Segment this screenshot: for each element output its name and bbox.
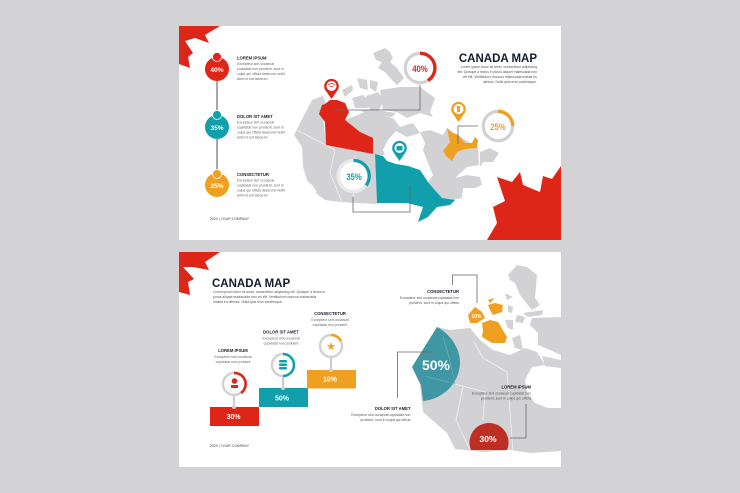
description bottom: Lorem ipsum dolor sit amet, consectetur adipiscing elit. Quisque a lectus in [213, 290, 325, 294]
footer bottom: 2020 | YOUR COMPANY [210, 444, 250, 448]
legend column: Excepteur sint occaecat [237, 178, 274, 182]
step labels: Excepteur sint occaecat [262, 336, 300, 340]
legend column: DOLOR SIT AMET [237, 114, 273, 119]
label: consectetur: proident, sunt in culpa qui officia [409, 301, 459, 305]
connector lines [333, 85, 478, 212]
coast cut bottom [426, 420, 437, 436]
region: teal [375, 154, 455, 222]
footer top: 2020 | YOUR COMPANY [210, 217, 250, 221]
region: red 30% [470, 423, 508, 450]
step chart: 10% [323, 376, 338, 384]
legend column: Excepteur sint occaecat [237, 120, 274, 124]
description bottom: purus aliquet malesuada non vel elit. Vestibulum rhoncus malesuada [213, 295, 316, 299]
legend column: CONSECTETUR [237, 172, 269, 177]
maple leaf corner top [179, 26, 220, 68]
legend column: LOREM IPSUM [237, 56, 267, 60]
label: dolor: DOLOR SIT AMET [375, 406, 411, 411]
province lines [443, 337, 513, 452]
legend column: culpa qui officia deserunt mollit [237, 188, 285, 192]
label: dolor: Excepteur sint occaecat cupidatat non [351, 413, 411, 417]
title description: elit. Quisque a lectus in purus aliquet malesuada non [457, 70, 537, 74]
legend column: anim id est laborum [237, 136, 268, 140]
label: lorem: Excepteur sint occaecat cupidatat non [472, 392, 531, 396]
region: orange 10%: 10% [471, 314, 482, 320]
region: red [319, 100, 373, 154]
pin orange [451, 102, 466, 122]
map bottom [351, 265, 561, 453]
label: consectetur: Excepteur sint occaecat cupidatat non [400, 296, 459, 300]
step chart: 50% [275, 396, 290, 402]
legend column: 35% [210, 125, 224, 132]
legend column: 40% [210, 67, 224, 74]
legend column [205, 52, 285, 198]
step chart: 30% [226, 414, 241, 421]
legend column: culpa qui officia deserunt mollit [237, 130, 285, 134]
step labels: DOLOR SIT AMET [263, 330, 299, 334]
pin teal [392, 141, 407, 161]
legend column: cupidatat non proident, sunt in [237, 126, 284, 130]
legend column: 25% [210, 183, 224, 190]
label: lorem [472, 384, 532, 400]
panel: top slide [179, 26, 561, 240]
title top: CANADA MAP [459, 53, 537, 65]
description bottom: massa eu ultrices. Nulla quis eros scelerisque. [213, 300, 283, 304]
donut 35: 35% [346, 172, 362, 183]
donut 35 [338, 160, 369, 192]
label: consectetur [400, 289, 459, 305]
map top [294, 48, 561, 240]
province lines top [297, 130, 355, 202]
pin red [324, 79, 339, 99]
region: red 30%: 30% [479, 434, 497, 444]
step labels [214, 311, 349, 364]
region: teal 50% [412, 327, 460, 401]
label: dolor [351, 406, 411, 422]
step labels: Excepteur sint occaecat [311, 318, 349, 322]
step chart: ★ [326, 341, 336, 353]
legend column: anim id est laborum [237, 77, 268, 81]
label: lorem: LOREM IPSUM [501, 384, 532, 390]
step labels: cupidatat non proident [216, 360, 250, 364]
donut 40 [405, 53, 435, 83]
title description: Lorem ipsum dolor sit amet, consectetur adipiscing [461, 65, 537, 69]
label: consectetur: CONSECTETUR [427, 289, 459, 294]
region: orange [443, 128, 478, 161]
step labels: Excepteur sint occaecat [214, 355, 252, 359]
description bottom [213, 290, 325, 304]
donut 40: 40% [412, 64, 428, 75]
legend column: Excepteur sint occaecat [237, 62, 274, 66]
step labels: cupidatat non proident [264, 342, 298, 346]
title bottom: CANADA MAP [212, 278, 290, 290]
title description: ultrices. Nulla quis eros scelerisque. [483, 80, 537, 84]
title description: vel elit. Vestibulum rhoncus malesuada massa eu [463, 75, 537, 79]
label: dolor: proident, sunt in culpa qui officia [361, 418, 411, 422]
title description [457, 65, 537, 84]
region: orange 10% [468, 298, 507, 343]
large maple leaf [487, 166, 561, 240]
step labels: LOREM IPSUM [218, 348, 248, 353]
coast cut top [306, 181, 316, 192]
legend column: culpa qui officia deserunt mollit [237, 72, 285, 76]
panel: bottom slide [179, 252, 561, 467]
step labels: cupidatat non proident [313, 323, 347, 327]
step chart [210, 335, 356, 426]
maple leaf corner bottom [179, 252, 220, 295]
legend column: cupidatat non proident, sunt in [237, 184, 284, 188]
legend column: cupidatat non proident, sunt in [237, 67, 284, 71]
donut 25 [483, 111, 513, 141]
connector lines [398, 275, 526, 438]
legend column: anim id est laborum [237, 194, 268, 198]
label: lorem: proident, sunt in culpa qui officia [481, 396, 531, 400]
step labels: CONSECTETUR [314, 311, 346, 316]
region: teal 50%: 50% [422, 357, 451, 373]
donut 25: 25% [490, 122, 506, 133]
